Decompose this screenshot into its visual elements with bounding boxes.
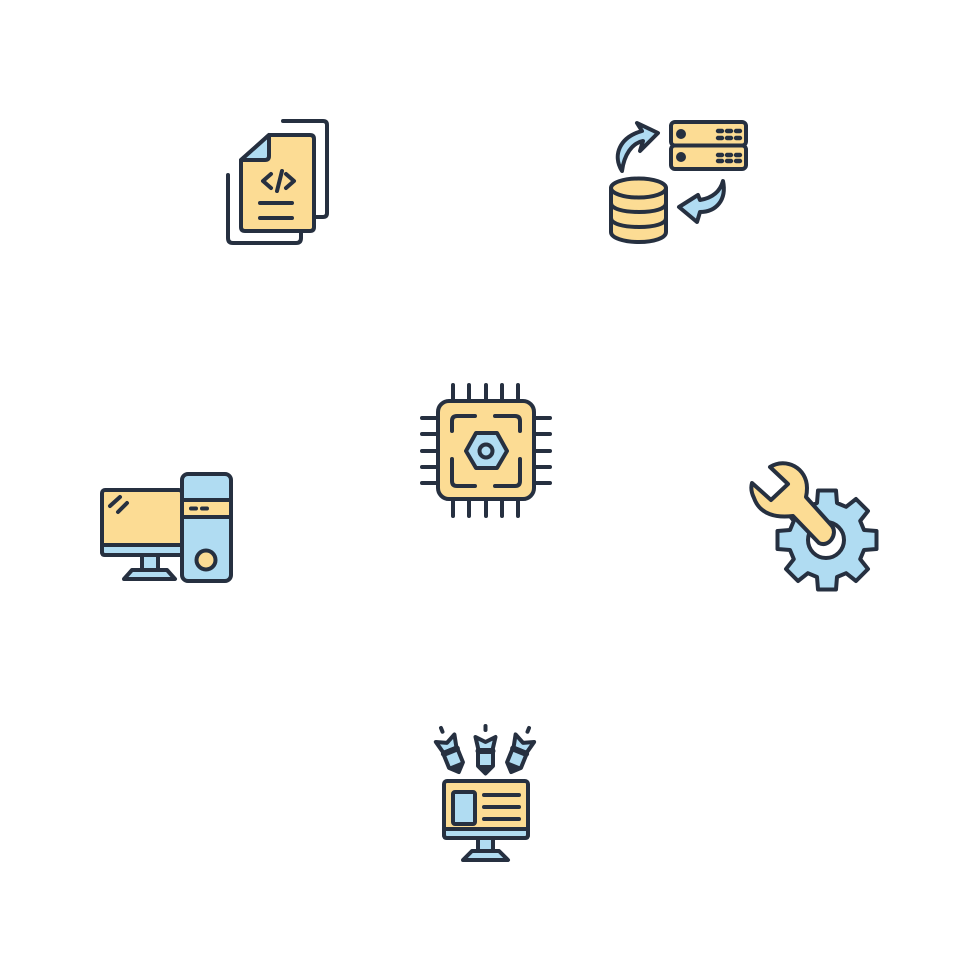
rocket left — [432, 724, 468, 776]
icon: monitor with rockets — [432, 724, 538, 860]
icon: processor chip — [422, 385, 550, 516]
database cylinder — [611, 178, 666, 242]
icon: code documents — [228, 121, 327, 243]
server rack — [671, 122, 746, 169]
icon: wrench and gear — [751, 463, 876, 590]
icon: database and server sync — [611, 122, 746, 242]
monitor — [444, 781, 528, 860]
icon: desktop computer — [102, 474, 231, 581]
arrow: up to server — [618, 123, 658, 171]
rocket middle — [476, 726, 496, 774]
rocket right — [502, 724, 538, 776]
arrow: down to database — [679, 181, 724, 222]
